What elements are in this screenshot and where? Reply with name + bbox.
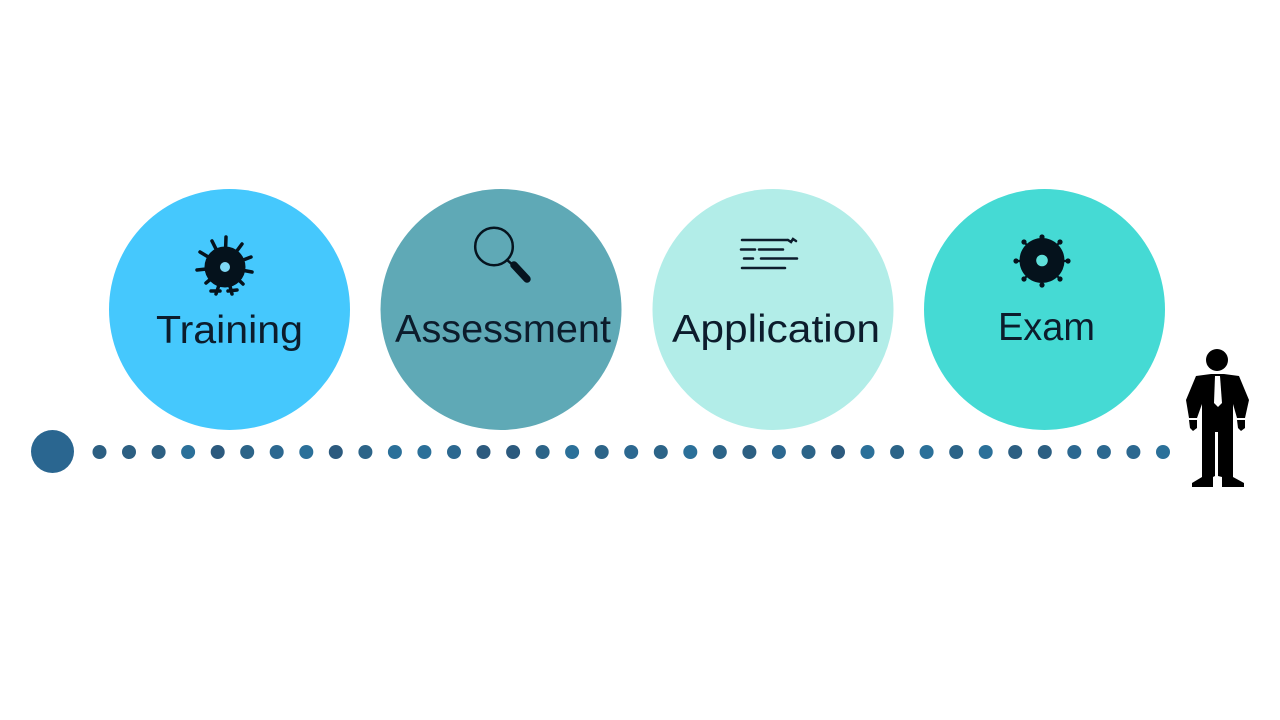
icon: businessman figure — [1186, 349, 1249, 487]
panel: Training — [109, 189, 350, 430]
panel: Exam — [924, 189, 1165, 430]
label: Assessment: Assessment — [395, 308, 611, 351]
label: Application: Application — [672, 308, 880, 351]
dotted timeline — [92, 445, 1170, 459]
panel: Application — [652, 189, 894, 430]
label: Training: Training — [156, 309, 303, 352]
icon: training gear — [197, 237, 252, 294]
icon: text lines — [741, 239, 797, 268]
timeline start dot — [31, 430, 74, 473]
icon: exam gear — [1013, 234, 1071, 288]
icon: magnifying glass — [475, 228, 527, 279]
panel: Assessment — [380, 189, 622, 430]
label: Exam: Exam — [998, 306, 1095, 349]
